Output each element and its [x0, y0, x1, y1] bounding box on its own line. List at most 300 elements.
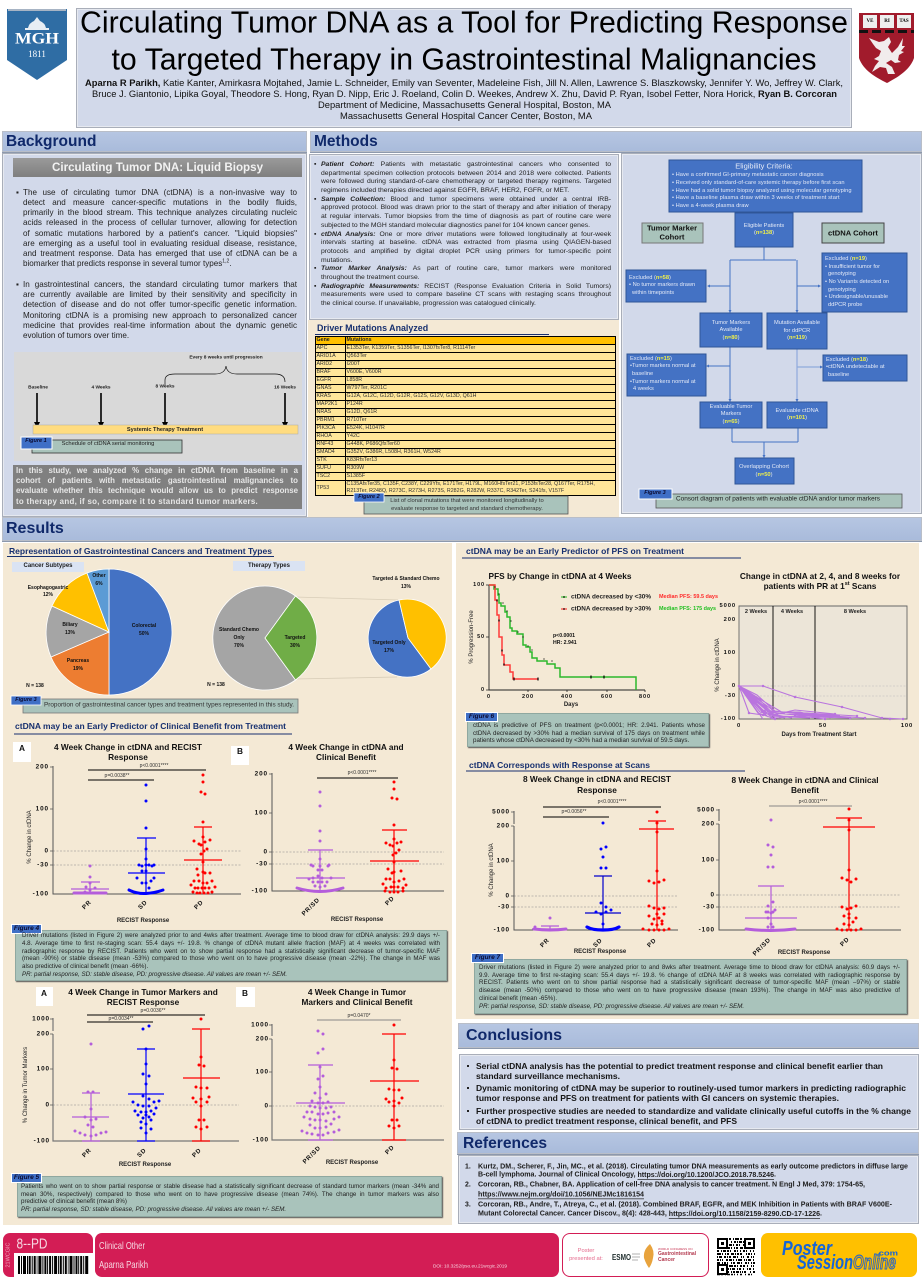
heading: representation of cancers: Representation of Gastrointestinal Cancers and Treatment Types	[9, 546, 272, 556]
box: eligibility criteria: • Received only standard-of-care systemic therapy before first scan	[672, 180, 845, 186]
figure 6 caption text: ctDNA decreased by >30% had a median survival of 175 days on treatment while	[473, 730, 705, 736]
box: excluded 18: Excluded (n=18)	[826, 357, 868, 363]
figure 4 caption text	[22, 932, 440, 978]
chart: 8 week ctDNA and RECIST: PR	[539, 937, 551, 949]
table: mutations: ARID2	[316, 361, 332, 367]
chart: 8 week ctDNA and RECIST	[489, 774, 678, 955]
footer: category and author: DOI: 10.3252/pso.eu.21wcgic.2019	[433, 1264, 508, 1268]
panel: methods text: ▪	[314, 196, 316, 203]
box: eligible patients: Eligible Patients	[744, 223, 784, 229]
figure 1: schedule of ctDNA monitoring: 4 Weeks	[91, 384, 111, 390]
box: eligible patients: (n=138)	[754, 230, 774, 236]
chart: 4 week ctDNA and RECIST: % Change in ctDNA	[27, 810, 33, 864]
chart: 4 week tumor markers and RECIST: 1000	[32, 1016, 50, 1022]
chart: cancer subtypes pie: 12%	[43, 592, 54, 598]
figure 7 label: Figure 7	[475, 954, 500, 961]
references text: 2.	[465, 1182, 471, 1188]
box: excluded 15: 4 weeks	[633, 386, 654, 392]
panel: methods text: ▪	[314, 230, 316, 238]
footer: presented at logos: Gastrointestinal	[658, 1251, 697, 1257]
chart: therapy types pie: 13%	[401, 584, 412, 590]
figure 1: schedule of ctDNA monitoring: 16 Weeks	[274, 384, 296, 390]
box: excluded 19: genotyping	[828, 271, 856, 277]
table: mutations: G352V, G386R, L508H, R361H, W524R	[346, 449, 441, 455]
chart: PFS Kaplan-Meier: 100	[473, 582, 485, 588]
table: mutations: G12D, Q61R	[346, 409, 377, 415]
box: excluded 19: genotyping	[828, 287, 856, 293]
chart: 4 week ctDNA and RECIST: RECIST Response	[117, 918, 170, 924]
chart: 8 week ctDNA and clinical benefit: -100	[699, 926, 715, 934]
footer: presented at logos	[569, 1244, 697, 1268]
table: mutations: Mutations	[346, 337, 372, 343]
chart: 4 week tumor markers and RECIST: 4 Week Change in Tumor Markers and	[68, 987, 218, 997]
table: mutations: G12A, G12C, G12D, G12R, G12S, G12V, G13D, Q61H	[346, 393, 476, 399]
chart: 8 week ctDNA and RECIST: p<0.0001****	[598, 799, 626, 805]
chart: PFS Kaplan-Meier: % Progression-Free	[469, 610, 475, 664]
chart: 8 week ctDNA and clinical benefit: -30	[703, 904, 715, 910]
footer: category and author	[99, 1240, 508, 1271]
table: mutations: MAP2K1	[316, 401, 337, 407]
chart: PFS Kaplan-Meier: 0	[487, 694, 491, 700]
authors and affiliations: Bruce J. Giantonio, Lipika Goyal, Theodore S. Hong, Ryan D. Nipp, Eric J. Roeland, Colin D. Weekes, Andrew X. Zhu, David P. Ryan, Isobel Fetter, Nora Horick, Ryan B. Corcoran	[92, 89, 837, 99]
background paragraph 1: acids released in the process of cellular turnover, allowing for detection	[23, 218, 297, 227]
chart: 8 week ctDNA and clinical benefit: PD	[839, 936, 851, 948]
footer: presented at logos: presented at:	[569, 1256, 603, 1262]
table: mutations: SMAD4	[316, 449, 335, 455]
figure 4 caption text: radiographic response by RECIST. Patients who went on to show partial response had a statistically significant decrease of tumor-specific MAF	[22, 948, 440, 954]
chart: PFS Kaplan-Meier: PFS by Change in ctDNA at 4 Weeks	[489, 571, 632, 581]
chart: 4 week tumor markers and clinical benefit	[236, 987, 444, 1166]
section header: Methods	[310, 131, 922, 152]
box: tumor markers available: (n=80)	[723, 335, 740, 341]
chart: PFS Kaplan-Meier: 50	[477, 634, 485, 640]
background paragraph 2	[16, 280, 297, 340]
footer: PosterSessionOnline logo: Session	[797, 1252, 853, 1274]
chart: 8 week ctDNA and RECIST: 200	[497, 822, 510, 830]
chart: 4 week ctDNA and clinical benefit: 100	[255, 810, 268, 816]
authors and affiliations	[85, 78, 843, 121]
figure 5 label	[11, 1173, 42, 1183]
chart: 4 week ctDNA and RECIST: 0	[45, 848, 49, 854]
figure 7 caption text: disease (mean -50%) compared to those who went on to have progressive disease (mean 193%). The change in MAF was also predictive of	[479, 987, 900, 994]
box: eligibility criteria: • Have had a solid tumor biopsy analyzed using molecular genotyping	[672, 188, 852, 194]
figure 4 label: Figure 4	[14, 925, 39, 932]
references text: https://www.nejm.org/doi/10.1056/NEJMc1816154	[478, 1192, 644, 1198]
chart: 4 week tumor markers and clinical benefit: 0	[265, 1102, 269, 1110]
footer block: poster id	[3, 1233, 93, 1277]
logo: Harvard shield: RI	[884, 19, 890, 24]
chart: 4 week ctDNA and RECIST: p<0.0001****	[140, 763, 168, 769]
box: eligibility criteria: • Have a confirmed GI-primary metastatic cancer diagnosis	[672, 172, 824, 178]
table: mutations: E1353Ter, K1359Ter, S1356Ter, I1307fsTer8, R1114Ter	[346, 345, 475, 351]
logo: MGH shield	[7, 9, 67, 80]
table: mutations: P124R	[346, 401, 363, 407]
chart: 8 week ctDNA and RECIST: Response	[577, 785, 617, 795]
figure 6 caption text: ctDNA is predictive of PFS on treatment (p<0.0001; HR: 2.941. Patients whose	[473, 722, 705, 729]
chart: 4 week tumor markers and clinical benefit: RECIST Response	[326, 1160, 379, 1166]
panel: methods text: approved protocol. Blood was drawn prior to the start of therapy and after initiation of therapy	[321, 204, 611, 211]
background subtitle bar: Circulating Tumor DNA: Liquid Biopsy	[52, 161, 263, 174]
box: excluded 15: baseline	[632, 371, 653, 377]
box: overlapping cohort: Overlapping Cohort	[739, 464, 789, 470]
figure 5 caption	[17, 1176, 442, 1217]
box: tumor markers available	[700, 313, 762, 347]
chart: cancer subtypes pie: 13%	[65, 630, 76, 636]
chart: therapy types pie: Targeted Only	[372, 640, 406, 646]
footer: presented at logos: ESMO	[612, 1252, 631, 1262]
box: evaluable tumor markers: Evaluable Tumor	[710, 404, 752, 410]
chart: 4 week tumor markers and RECIST: 200	[37, 1030, 50, 1038]
chart: therapy types pie: 17%	[384, 648, 395, 654]
text: ▪	[16, 188, 19, 197]
chart: cancer subtypes pie: 50%	[139, 631, 150, 637]
figure 7 caption	[474, 959, 907, 1014]
figure 7 caption text: RECIST. Patients who went on to show partial response had a statistically significant decrease of tumor-specific MAF (mean –97%) or stable	[479, 979, 900, 986]
table: mutations: R309W	[346, 465, 364, 471]
box: excluded 18: •ctDNA undetectable at	[826, 364, 885, 370]
box: tumor marker cohort	[642, 223, 703, 243]
figure 2 caption	[354, 493, 568, 514]
footer: PosterSessionOnline logo: Online	[853, 1252, 896, 1274]
panel: methods text: throughout the treatment course.	[321, 274, 420, 281]
panel: methods text: regimens included therapies directed against EGFR, BRAF, HER2, FGFR, or MET.	[321, 187, 569, 194]
background paragraph 1: The use of circulating tumor DNA (ctDNA) is a non-invasive way to	[23, 188, 297, 197]
table: mutations: Q563Ter	[346, 353, 367, 359]
panel: methods text	[309, 154, 619, 320]
box: excluded 15: Excluded (n=15)	[630, 356, 672, 362]
footer: poster number and barcode: 8--PD	[16, 1236, 48, 1252]
footer: poster number and barcode	[6, 1236, 93, 1277]
footer: presented at logos: WORLD CONGRESS ON	[658, 1247, 693, 1251]
background paragraph 2: evolution of tumors over time.	[23, 331, 129, 340]
chart: 4 week tumor markers and RECIST: p=0.0036**	[141, 1008, 165, 1014]
section header: Background: Background	[6, 133, 96, 150]
chart: therapy types pie	[207, 561, 446, 690]
chart: 4 week tumor markers and RECIST: SD	[136, 1147, 148, 1159]
chart: therapy types pie: 70%	[234, 643, 245, 649]
box: mutation available: for ddPCR	[784, 328, 810, 334]
authors and affiliations: Department of Medicine, Massachusetts General Hospital, Boston, MA	[318, 100, 611, 110]
chart: 8 week ctDNA and clinical benefit	[697, 775, 901, 957]
box: eligibility criteria: • Have a 4-week plasma draw	[672, 203, 749, 209]
table: mutations: STK	[316, 457, 327, 463]
chart: 4 week ctDNA and RECIST: 4 Week Change in ctDNA and RECIST	[54, 742, 202, 752]
table: mutations: RNF43	[316, 441, 333, 447]
figure 3 proportions caption	[11, 696, 298, 713]
chart: 4 week ctDNA and clinical benefit: 200	[255, 770, 268, 778]
panel: methods text: departmental specimen collection protocols between 2014 and 2018 were collected. Patients	[321, 170, 611, 177]
figure 1: schedule of ctDNA monitoring: Figure 1	[25, 438, 47, 444]
box: excluded 19: • Undesignable/unusable	[825, 294, 888, 300]
box: eligibility criteria: Eligibility Criteria:	[735, 162, 793, 170]
chart: PFS Kaplan-Meier: ctDNA decreased by >30%	[571, 606, 652, 612]
chart: 4 week ctDNA and clinical benefit: B	[237, 746, 243, 756]
box: tumor markers available: Tumor Markers	[712, 320, 750, 326]
authors and affiliations: Massachusetts General Hospital Cancer Center, Boston, MA	[340, 111, 592, 121]
chart: change in ctDNA at 2, 4, 8 weeks: st	[845, 581, 850, 587]
chart: 4 week ctDNA and RECIST: PD	[193, 899, 205, 911]
figure 4 caption text: Driver mutations (listed in Figure 2) were analyzed prior to and 4wks after treatment. Average time to blood draw for ctDNA analysis: 29.9 days +/-	[22, 932, 440, 939]
chart: change in ctDNA at 2, 4, 8 weeks: 200	[724, 617, 736, 623]
box: evaluable tumor markers: Markers	[721, 411, 741, 417]
figure 4 caption text: also predictive of clinical benefit (mean -66%).	[22, 963, 148, 970]
table: mutations: TSC2	[316, 473, 330, 479]
chart: 4 week tumor markers and RECIST: -100	[34, 1138, 50, 1144]
chart: cancer subtypes pie: 6%	[95, 581, 103, 587]
table: mutations: K83RfsTer13	[346, 457, 377, 463]
figure 7 caption text: PR: partial response, SD: stable disease, PD: progressive disease. All values are mean +/- SEM.	[479, 1003, 744, 1010]
figure 2 caption: List of clonal mutations that were monitored longitudinally to	[390, 498, 544, 504]
chart: change in ctDNA at 2, 4, 8 weeks: 100	[901, 723, 913, 729]
chart: therapy types pie: Targeted	[285, 635, 305, 641]
table: mutations: C135AfsTer35, C135F, C238Y, C229Yfs, E171Ter, H179L, M160HfsTer21, P153fsTer28, Q167Ter, R175H,	[346, 481, 595, 487]
panel: results left column	[3, 543, 452, 1225]
chart: change in ctDNA at 2, 4, 8 weeks	[715, 571, 913, 738]
figure 4 caption text: (mean -90%) or stable disease (mean -53%) compared to those who went on to have progressive disease (mean -22%). The change in MAF was	[22, 955, 440, 962]
footer: category and author: Aparna Parikh	[99, 1259, 148, 1271]
chart: 4 week tumor markers and clinical benefit: 100	[256, 1068, 269, 1076]
table: mutations: PIK3CA	[316, 425, 335, 431]
figure 4 caption text: PR: partial response, SD: stable disease, PD: progressive disease. All values are mean +/- SEM.	[22, 971, 287, 978]
panel: methods text: measurements were used to compare baseline CT scans with restaging scans throughout	[321, 291, 611, 298]
chart: change in ctDNA at 2, 4, 8 weeks: 50	[819, 723, 827, 729]
chart: therapy types pie: Therapy Types	[248, 563, 291, 569]
background paragraph 1: of somatic mutations harbored by a patient's cancer. "Liquid biopsies"	[23, 229, 297, 238]
chart: 4 week ctDNA and RECIST: -100	[33, 890, 49, 898]
table: mutations: RHOA	[316, 433, 332, 439]
conclusions text: standard surveillance mechanisms.	[476, 1071, 620, 1081]
title panel	[76, 8, 852, 128]
chart: PFS Kaplan-Meier: 400	[561, 694, 573, 700]
figure 6 caption text: patients whose ctDNA decreased by <30% had a median survival of 59.5 days.	[473, 737, 689, 744]
background paragraph 2: In gastrointestinal cancers, the standard circulating tumor markers that	[23, 280, 297, 289]
figure 3 proportions caption: Figure 3	[15, 697, 37, 703]
table: mutations: SUFU	[316, 465, 331, 471]
chart: 8 week ctDNA and clinical benefit: 200	[702, 820, 715, 828]
chart: 4 week ctDNA and clinical benefit: -30	[256, 860, 268, 868]
box: evaluable ctDNA	[767, 402, 827, 428]
figure 1: schedule of ctDNA monitoring: Baseline	[28, 384, 48, 390]
heading: driver mutations: Driver Mutations Analyzed	[317, 323, 428, 333]
footer: presented at logos: Cancer	[658, 1257, 675, 1263]
study aim callout: to therapy and, if so, compare it to standard tumor markers.	[16, 497, 258, 506]
chart: therapy types pie: 30%	[290, 643, 301, 649]
box: excluded 19	[822, 253, 907, 312]
chart: 8 week ctDNA and RECIST: % Change in ctDNA	[489, 843, 495, 897]
chart: therapy types pie: N = 138	[207, 682, 225, 688]
background paragraph 2: Monitoring ctDNA is a promising new approach to personalized cancer	[23, 311, 297, 320]
box: excluded 15: •Tumor markers normal at	[630, 363, 696, 369]
chart: 4 week tumor markers and RECIST: 0	[46, 1102, 50, 1108]
panel: consort diagram background	[621, 153, 922, 514]
chart: change in ctDNA at 2, 4, 8 weeks: 2 Weeks	[745, 609, 767, 615]
chart: 4 week ctDNA and clinical benefit: p<0.0001****	[348, 770, 376, 776]
table: mutations: G448K, P686QfsTer60	[346, 441, 400, 447]
references text: 1.	[465, 1164, 471, 1170]
chart: change in ctDNA at 2, 4, 8 weeks: 0	[732, 683, 736, 689]
figure 7 caption text	[479, 964, 900, 1010]
authors and affiliations: Aparna R Parikh, Katie Kanter, Amirkasra Mojtahed, Jamie L. Schneider, Emily van Seventer, Madeleine Fish, Jill N. Allen, Lawrence S. Blaszkowsky, Jennifer Y. Wo, Jeffrey W. Clark,	[85, 78, 843, 88]
chart: 4 week ctDNA and clinical benefit: PD	[384, 895, 396, 907]
text: ▪	[16, 280, 19, 289]
panel: methods text: mutations.	[321, 257, 352, 264]
chart: therapy types pie: Only	[233, 635, 245, 641]
box: evaluable ctDNA: (n=101)	[787, 415, 807, 421]
chart: change in ctDNA at 2, 4, 8 weeks: 100	[724, 650, 736, 656]
chart: change in ctDNA at 2, 4, 8 weeks: 0	[737, 723, 741, 729]
panel: methods text: Patient Cohort: Patients with metastatic gastrointestinal cancers who consented to	[321, 161, 611, 168]
background paragraph 1: and treatment response. Data has emerged that use of ctDNA can be a	[23, 249, 297, 258]
box: excluded 19: • Insufficient tumor for	[825, 264, 880, 270]
chart: cancer subtypes pie: Pancreas	[67, 658, 89, 664]
title: to Targeted Therapy in Gastrointestinal Malignancies	[112, 42, 816, 76]
chart: 4 week tumor markers and RECIST: RECIST Response	[107, 997, 180, 1007]
chart: 4 week tumor markers and clinical benefit: PD	[384, 1144, 396, 1156]
footer block: presented at	[562, 1233, 709, 1277]
figure 5 caption text	[21, 1183, 439, 1213]
figure 4 label	[11, 924, 42, 934]
table: mutations: ARID1A	[316, 353, 336, 359]
figure 5 caption text: predictive of clinical benefit (mean 8%)	[21, 1198, 127, 1205]
box: excluded 58: within timepoints	[631, 290, 674, 296]
chart: PFS Kaplan-Meier: 600	[601, 694, 613, 700]
panel: methods text: Radiographic Measurements: RECIST (Response Evaluation Criteria in Solid Tumors)	[321, 283, 611, 290]
table: mutations: PBRM1	[316, 417, 335, 423]
panel: methods text: were followed during standard-of-care chemotherapy or targeted therapy regimens. Targeted	[321, 178, 611, 185]
heading: response at scans: ctDNA Corresponds with Response at Scans	[469, 760, 650, 770]
table: mutations: GNAS	[316, 385, 332, 391]
box: excluded 19: • No Variants detected on	[825, 279, 889, 285]
footer: category and author: Clinical Other	[99, 1240, 145, 1252]
box: eligibility criteria	[669, 160, 862, 212]
conclusions text	[467, 1061, 911, 1126]
figure 3 caption: Figure 3	[644, 490, 666, 496]
box: excluded 15: •Tumor markers normal at	[630, 379, 696, 385]
chart: 4 week tumor markers and clinical benefit: PR/SD	[302, 1145, 322, 1165]
chart: 8 week ctDNA and RECIST: PD	[646, 937, 658, 949]
background paragraph 1: detect and measure cancer-specific mutations in the bodily fluids,	[23, 198, 297, 207]
study aim callout: cohort of patients with metastatic gastrointestinal malignancies to	[16, 476, 298, 485]
chart: 8 week ctDNA and RECIST: RECIST Response	[574, 949, 627, 955]
title: Circulating Tumor DNA as a Tool for Predicting Response	[80, 4, 848, 40]
background paragraph 1: primarily in the blood stream. This technique analyzes circulating nucleic	[23, 208, 297, 217]
section header: Conclusions: Conclusions	[466, 1027, 562, 1044]
chart: PFS Kaplan-Meier: 200	[522, 694, 534, 700]
table: mutations: R710Ter	[346, 417, 367, 423]
chart: PFS Kaplan-Meier: HR: 2.941	[553, 640, 577, 646]
section header: Results	[2, 517, 922, 541]
panel: methods text: ▪	[314, 161, 316, 168]
section header: References: References	[463, 1135, 547, 1152]
chart: 8 week ctDNA and RECIST: p=0.0056**	[562, 809, 586, 815]
chart: PFS Kaplan-Meier: p<0.0001	[553, 633, 575, 639]
chart: PFS Kaplan-Meier: Median PFS: 59.5 days	[659, 594, 718, 600]
chart: cancer subtypes pie: N = 138	[26, 683, 44, 689]
chart: 4 week ctDNA and clinical benefit	[231, 742, 444, 923]
section header: Results: Results	[6, 520, 64, 537]
figure 5 caption text: Patients who went on to show partial response or stable disease had a statistically significant decrease of standard tumor markers (mean -34% and	[21, 1183, 439, 1190]
panel: methods text: the clinical course. If unavailable, progression was catalogued clinically.	[321, 300, 536, 307]
chart: 8 week ctDNA and RECIST: -30	[498, 904, 510, 910]
chart: 8 week ctDNA and RECIST: 8 Week Change in ctDNA and RECIST	[523, 774, 671, 784]
figure 3 caption	[639, 489, 902, 508]
chart: 8 week ctDNA and RECIST: SD	[592, 937, 604, 949]
table: mutations: S1385F	[346, 473, 365, 479]
box: excluded 18	[823, 355, 907, 381]
background paragraph 2: medicine that provides real-time information about the dynamic genetic	[23, 321, 297, 330]
study aim callout: evaluate whether this technique would allow us to predict response	[16, 486, 298, 495]
logo: Harvard shield: TAS	[899, 19, 909, 24]
figure 2 caption: evaluate response to targeted and standard chemotherapy.	[391, 506, 543, 512]
box: overlapping cohort	[735, 458, 794, 484]
box: tumor markers available: Available	[720, 327, 742, 333]
box: eligibility criteria: • Have a baseline plasma draw within 3 weeks of treatment start	[672, 195, 840, 201]
box: mutation available: Mutation Available	[774, 320, 820, 326]
box: ctDNA cohort: ctDNA Cohort	[828, 228, 878, 238]
footer: QR code	[717, 1238, 755, 1275]
figure 6 caption text	[473, 722, 705, 744]
panel: methods text: ▪	[314, 283, 316, 290]
chart: 4 week tumor markers and clinical benefit: 4 Week Change in Tumor	[308, 987, 407, 997]
section header: Methods: Methods	[314, 133, 378, 150]
box: excluded 19: ddPCR probe	[828, 302, 862, 308]
chart: 4 week tumor markers and RECIST: p=0.0034**	[109, 1016, 133, 1022]
figure 5 caption text: mean 30%, respectively) compared to those who went on to have progressive disease (mean 74%). The change in tumor markers was also	[21, 1191, 439, 1198]
chart: 8 week ctDNA and RECIST: -100	[494, 926, 510, 934]
figure 6 label: Figure 6	[469, 713, 494, 720]
references text: Mutant Colorectal Cancer. Cancer Discov., 8(4): 428-443, https://doi.org/10.1158/2159-8290.CD-17-1226 .	[478, 1210, 822, 1218]
chart: change in ctDNA at 2, 4, 8 weeks: Days from Treatment Start	[781, 732, 857, 738]
references text	[465, 1164, 908, 1218]
chart: 4 week ctDNA and RECIST: Response	[108, 752, 148, 762]
figure 5 label: Figure 5	[14, 1174, 39, 1181]
section header: Conclusions	[458, 1023, 919, 1048]
chart: 4 week ctDNA and RECIST: -30	[37, 862, 49, 868]
figure 3 caption: Consort diagram of patients with evaluable ctDNA and/or tumor markers	[676, 496, 880, 502]
figure 7 caption text: Driver mutations (listed in Figure 2) were analyzed prior to and 8wks after treatment. Average time to blood draw for ctDNA analysis: 60.9 days +/-	[479, 964, 900, 971]
panel: methods text: subjected to the MGH standard molecular diagnostics panel for 104 known cancer genes.	[321, 222, 590, 229]
figure 1: schedule of ctDNA monitoring: Every 8 weeks until progression	[189, 354, 263, 360]
references text: Corcoran, RB., Andre, T., Atreya, C., et al. (2018). Combined BRAF, EGFR, and MEK Inhibition in Patients with BRAF V600E-	[478, 1202, 893, 1208]
panel: background	[2, 153, 307, 517]
chart: 8 week ctDNA and clinical benefit: Benefit	[791, 785, 819, 795]
study aim callout: In this study, we analyzed % change in ctDNA from baseline in a	[16, 466, 298, 475]
background paragraph 2: are currently available are limited by their sensitivity and specificity in	[23, 290, 297, 299]
chart: 4 week ctDNA and RECIST: A	[19, 743, 25, 753]
footer: poster number and barcode: 21WCGIC	[6, 1242, 12, 1268]
references text: Kurtz, DM., Scherer, F., Jin, MC., et al. (2018). Circulating tumor DNA measurements as early outcome predictors in diffuse large	[478, 1164, 908, 1170]
background subtitle bar	[13, 158, 302, 177]
chart: cancer subtypes pie: 19%	[73, 666, 84, 672]
logo: MGH shield: MGH	[15, 30, 60, 48]
table: mutations	[315, 336, 616, 496]
chart: 4 week tumor markers and RECIST: PD	[191, 1147, 203, 1159]
logo: MGH shield: 1811	[28, 49, 46, 59]
chart: change in ctDNA at 2, 4, 8 weeks: -100	[721, 716, 736, 722]
references text: B-cell lymphoma. Journal of Clinical Oncology, https://doi.org/10.1200/JCO.2018.78.5246 .	[478, 1172, 776, 1178]
chart: change in ctDNA at 2, 4, 8 weeks: Scans	[850, 581, 877, 591]
title	[80, 4, 848, 76]
chart: PFS Kaplan-Meier: 800	[639, 694, 651, 700]
figure 4 caption text: 4.8. Average time to first re-staging scan: 55.4 days +/- 19.8. % change of ctDNA mutant allele fraction (MAF) at 4 weeks was correlated with	[22, 940, 440, 947]
conclusions text: Serial ctDNA analysis has the potential to predict treatment response and clinical benefit earlier than	[476, 1061, 883, 1071]
table: mutations: L858R	[346, 377, 362, 383]
chart: 4 week ctDNA and clinical benefit: RECIST Response	[331, 917, 384, 923]
chart: change in ctDNA at 2, 4, 8 weeks: patients with PR at 1	[764, 581, 845, 591]
figure 6 caption	[467, 713, 709, 747]
table: mutations: APC	[316, 345, 327, 351]
chart: 4 week ctDNA and clinical benefit: PR/SD	[301, 897, 321, 917]
